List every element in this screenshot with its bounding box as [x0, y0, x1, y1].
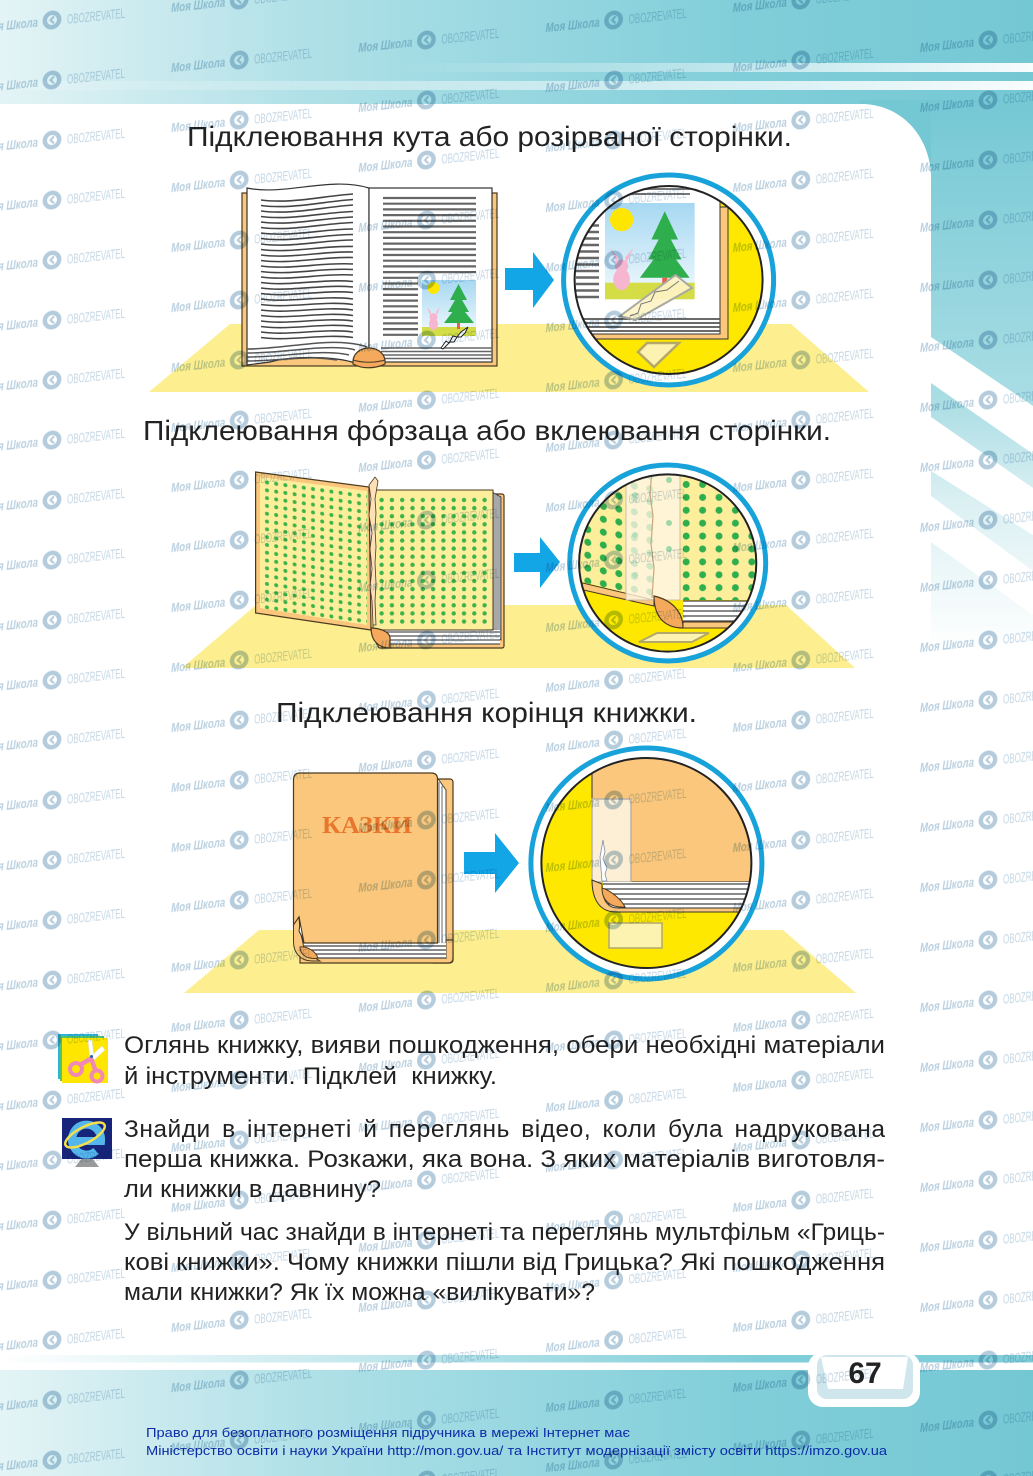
- spine curve: [592, 880, 760, 912]
- illustration: open book with torn page: [149, 184, 869, 392]
- title on cover: КАЗКИ: [322, 813, 412, 839]
- icon: internet monitor: [62, 1118, 112, 1167]
- page stack: [303, 943, 446, 958]
- page stack: [683, 602, 746, 620]
- right endpaper: [654, 476, 756, 600]
- heading: spine: Підклеювання корінця книжки.: [276, 697, 697, 728]
- spare tape: [609, 923, 662, 948]
- illustration: book with torn endpaper: [182, 472, 855, 668]
- left page text lines: [261, 194, 353, 339]
- table surface: [182, 605, 855, 668]
- page edges: [492, 492, 501, 640]
- arrow 1: [505, 252, 554, 308]
- instruction text 3: У вільний час знайди в інтернеті та переглянь мультфільм «Гриць-: [124, 1219, 885, 1246]
- illustration: closed book КАЗКИ: [184, 773, 856, 993]
- arrow 2: [514, 537, 560, 588]
- magnifier 1: [560, 170, 780, 390]
- magnifier 3: [531, 748, 762, 979]
- tear: [441, 327, 468, 349]
- bookmark dome: [353, 348, 385, 368]
- back cover: [430, 779, 453, 963]
- back cover: [378, 494, 504, 648]
- magnifier 2: [570, 465, 770, 661]
- spare tape: [639, 633, 709, 642]
- right page text lines: [383, 198, 476, 335]
- translucent tape: [592, 799, 631, 882]
- torn gutter: [369, 477, 378, 625]
- instruction text 2: ли книжки в давнину?: [124, 1176, 381, 1203]
- instruction text 1: [124, 1032, 885, 1090]
- instruction text 2: Знайди в інтернеті й переглянь відео, коли була надрукована: [124, 1116, 885, 1143]
- tape on tear: [620, 275, 692, 320]
- tear: [600, 840, 607, 881]
- instruction text 1: й інструменти. Підклей книжку.: [124, 1063, 497, 1090]
- page edges: [436, 776, 446, 958]
- leaf corner: [654, 596, 683, 628]
- page stack: [603, 882, 749, 908]
- icon: scissors and paper: [58, 1034, 108, 1083]
- table surface: [149, 324, 869, 392]
- page stack: [376, 630, 500, 644]
- instruction text 3: кові книжки». Чому книжки пішли від Грицька? Які пошкодження: [124, 1249, 885, 1276]
- instruction text 2: перша книжка. Розкажи, яка вона. З яких матеріалів виготовля-: [124, 1146, 885, 1173]
- book cover: [242, 193, 497, 366]
- translucent tape: [626, 465, 680, 600]
- spine curl: [294, 917, 320, 961]
- heading: corner or torn page: Підклеювання кута або розірваної сторінки.: [187, 121, 792, 152]
- spare tape: [638, 343, 679, 367]
- table surface: [184, 930, 856, 993]
- cover edge: [582, 582, 654, 607]
- page number badge: [808, 1352, 920, 1407]
- endpaper right: [373, 490, 493, 630]
- footer copyright note: Право для безоплатного розміщення підручника в мережі Інтернет має: [146, 1425, 630, 1440]
- front cover: [294, 773, 438, 943]
- instruction text 1: Оглянь книжку, вияви пошкодження, обери необхідні матеріали: [124, 1032, 885, 1059]
- cover: [592, 759, 750, 882]
- leaf corner: [602, 888, 625, 907]
- spine corner: [371, 628, 390, 648]
- left page: [247, 184, 369, 365]
- heading: endpaper: Підклеювання фо́рзаца або вклеювання сторінки.: [143, 415, 831, 446]
- footer copyright note: Міністерство освіти і науки України http://mon.gov.ua/ та Інститут модернізації змісту освіти https://imzo.gov.ua: [146, 1443, 888, 1458]
- instruction text 3: [124, 1219, 885, 1306]
- small picture: [422, 280, 476, 336]
- arrow 3: [464, 833, 519, 893]
- instruction text 2: [124, 1116, 885, 1203]
- left endpaper: [580, 476, 654, 600]
- footer copyright note: [146, 1425, 888, 1458]
- instruction text 3: мали книжки? Як їх можна «вилікувати»?: [124, 1279, 595, 1306]
- endpaper left: [260, 477, 367, 625]
- picture enlarged: [605, 203, 695, 299]
- page number badge: 67: [848, 1357, 882, 1390]
- front cover: [256, 472, 371, 630]
- right page: [369, 188, 492, 362]
